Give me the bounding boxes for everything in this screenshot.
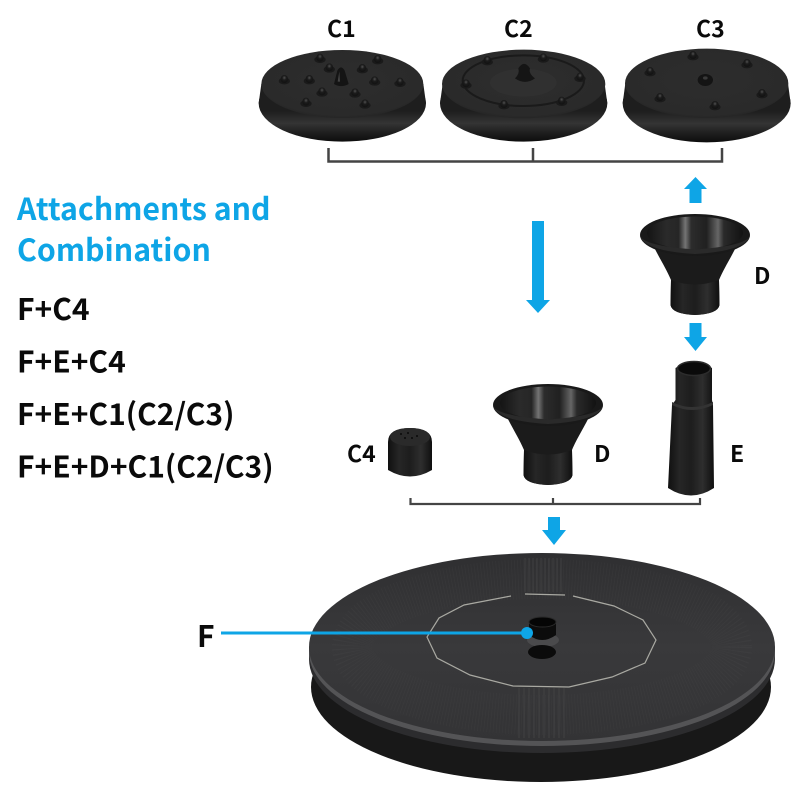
- combination list: F+E+D+C1(C2/C3): [17, 442, 274, 486]
- base F: solar fountain: [309, 553, 775, 782]
- label: C2: C2: [504, 10, 533, 44]
- heading: Attachments and Combination: Combination: [17, 226, 211, 270]
- label: D upper: D: [754, 257, 770, 291]
- radial ridges: [352, 579, 732, 715]
- arrow: down D to E: [684, 323, 707, 351]
- spout tube: [529, 622, 556, 640]
- bracket: C4 D E: [410, 498, 700, 504]
- combination list: F+E+C4: [17, 338, 126, 382]
- ridge patch bottom: [519, 688, 564, 738]
- attachment C3: [623, 49, 791, 142]
- label: E: E: [730, 435, 744, 469]
- solar panel top: [309, 553, 775, 741]
- arrow: down to F: [542, 517, 566, 545]
- arrow: large down: [526, 221, 550, 313]
- attachment C1: [259, 50, 426, 142]
- rim: [309, 647, 775, 753]
- combination list: [17, 285, 274, 486]
- solar cell ring: [427, 594, 656, 687]
- spout base shadow: [527, 633, 559, 647]
- heading: Attachments and Combination: [16, 185, 271, 270]
- label: C3: C3: [696, 10, 725, 44]
- label: C4: C4: [347, 435, 376, 469]
- attachment D upper: [640, 214, 750, 315]
- combination list: F+E+C1(C2/C3): [17, 390, 234, 434]
- ridge patch top: [525, 558, 561, 592]
- foam pad: [311, 592, 771, 782]
- spout reflection: [528, 645, 556, 659]
- bracket: C1 C2 C3: [328, 148, 722, 162]
- attachment C4: [388, 428, 432, 476]
- arrow: up to C row: [684, 177, 707, 203]
- attachment D lower: [493, 384, 603, 485]
- heading: Attachments and Combination: Attachments and: [16, 185, 271, 229]
- spout opening: [529, 617, 556, 627]
- callout line: F: [221, 627, 533, 639]
- label: C1: C1: [327, 10, 356, 44]
- attachment E: [668, 362, 714, 496]
- combination list: F+C4: [17, 285, 90, 329]
- label: D lower: D: [594, 435, 610, 469]
- rim highlight: [309, 558, 775, 746]
- attachment C2: [440, 50, 607, 142]
- label: F: F: [197, 612, 215, 656]
